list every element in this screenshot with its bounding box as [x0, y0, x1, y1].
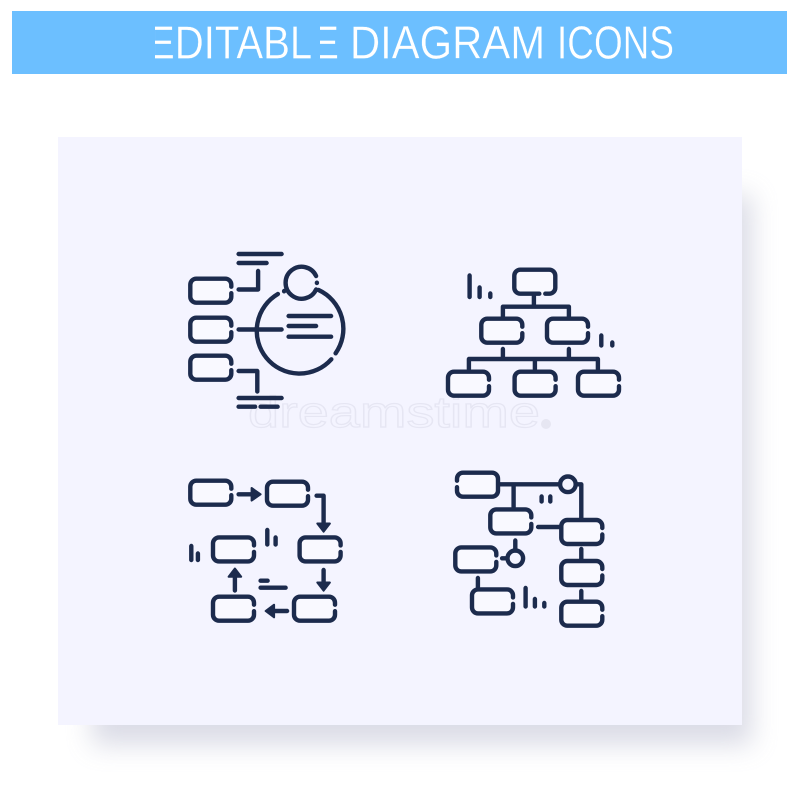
- connectors: [478, 484, 581, 600]
- large circle: [257, 290, 343, 374]
- watermark: dreamstime: [248, 388, 540, 437]
- arrows: [229, 488, 330, 617]
- connectors: [469, 294, 598, 369]
- accent bars: [470, 276, 612, 346]
- right-gap boxes: [455, 509, 602, 626]
- connectors and text lines: [239, 254, 331, 407]
- icon: mind map with circle: [190, 254, 343, 407]
- bottom boxes: [448, 372, 619, 396]
- flow boxes: [190, 481, 341, 621]
- left-gap box: [457, 473, 498, 497]
- icon: cycle flow chart: [190, 481, 341, 621]
- accent bars: [526, 496, 550, 606]
- icon: branching flow diagram: [455, 473, 602, 626]
- icon: hierarchy tree: [448, 270, 619, 396]
- top box: [514, 270, 555, 294]
- title text: EDITABLE: [148, 16, 339, 68]
- middle boxes: [481, 319, 588, 343]
- junction circles: [508, 476, 576, 566]
- panel shadow: [92, 195, 752, 745]
- node boxes: [190, 279, 231, 380]
- title banner: [12, 11, 787, 74]
- panel background: [58, 137, 742, 725]
- title text: ICONS: [557, 16, 674, 68]
- small circle: [284, 267, 317, 299]
- title text: DIAGRAM: [350, 16, 545, 68]
- accent bars and lines: [191, 530, 286, 588]
- title text: [148, 16, 674, 68]
